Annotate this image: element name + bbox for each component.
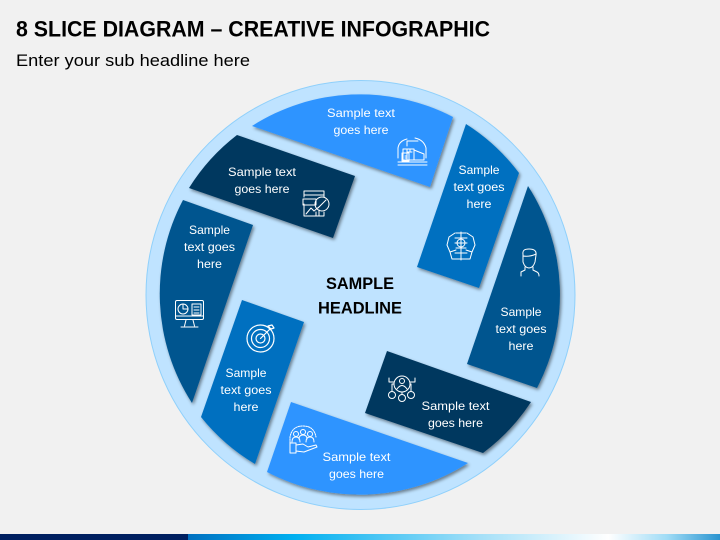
panel: left dark blue slice xyxy=(160,200,253,403)
lower right slice text: goes here xyxy=(428,416,483,430)
left slice text: Sample xyxy=(189,223,230,237)
title: 8 SLICE DIAGRAM – CREATIVE INFOGRAPHIC xyxy=(16,16,490,42)
top slice text: Sample text xyxy=(327,106,396,120)
bottom slice text: goes here xyxy=(329,467,384,481)
panel: top slice xyxy=(252,94,453,187)
upper left slice text: goes here xyxy=(234,182,290,196)
left slice text: text goes xyxy=(184,240,235,254)
right slice text: here xyxy=(508,339,534,353)
lower left slice text xyxy=(220,366,272,414)
bottom slice text: Sample text xyxy=(322,450,391,464)
icon: body and brain xyxy=(447,232,475,260)
icon: analytics window xyxy=(303,191,329,216)
lower right slice text xyxy=(422,399,490,430)
lower right slice text: Sample text xyxy=(422,399,490,413)
upper right slice text xyxy=(454,163,504,211)
panel: upper left navy slice xyxy=(189,135,355,238)
footer bar xyxy=(0,534,720,540)
lower left slice text: Sample xyxy=(226,366,267,380)
icon: monitor with charts xyxy=(176,300,204,327)
upper left slice text: Sample text xyxy=(228,165,297,179)
icon: person xyxy=(521,249,539,276)
bottom slice text xyxy=(322,450,391,481)
upper right slice text: Sample xyxy=(458,163,500,177)
panel: upper right medium blue slice xyxy=(417,124,519,288)
icon: team network xyxy=(388,376,415,402)
center headline: SAMPLE xyxy=(326,275,394,293)
lower left slice text: here xyxy=(234,400,259,414)
upper right slice text: here xyxy=(466,197,492,211)
panel: lower right navy slice xyxy=(365,351,531,453)
left slice text xyxy=(184,223,235,271)
upper right slice text: text goes xyxy=(454,180,504,194)
icon: hand with people xyxy=(290,426,317,453)
center headline xyxy=(318,275,402,318)
center headline: HEADLINE xyxy=(318,300,402,318)
panel: lower left medium blue slice xyxy=(201,300,304,464)
left slice text: here xyxy=(197,257,222,271)
top slice text xyxy=(327,106,396,137)
top slice text: goes here xyxy=(334,123,389,137)
upper left slice text xyxy=(228,165,297,196)
right slice text: text goes xyxy=(496,322,546,336)
panel: bottom slice xyxy=(267,402,468,495)
outer circle xyxy=(146,80,575,510)
subtitle: Enter your sub headline here xyxy=(16,51,250,70)
panel: right dark blue slice xyxy=(467,186,560,388)
icon: buildings xyxy=(398,138,427,165)
icon: target xyxy=(247,325,274,352)
right slice text: Sample xyxy=(500,305,542,319)
right slice text xyxy=(496,305,546,353)
lower left slice text: text goes xyxy=(220,383,272,397)
